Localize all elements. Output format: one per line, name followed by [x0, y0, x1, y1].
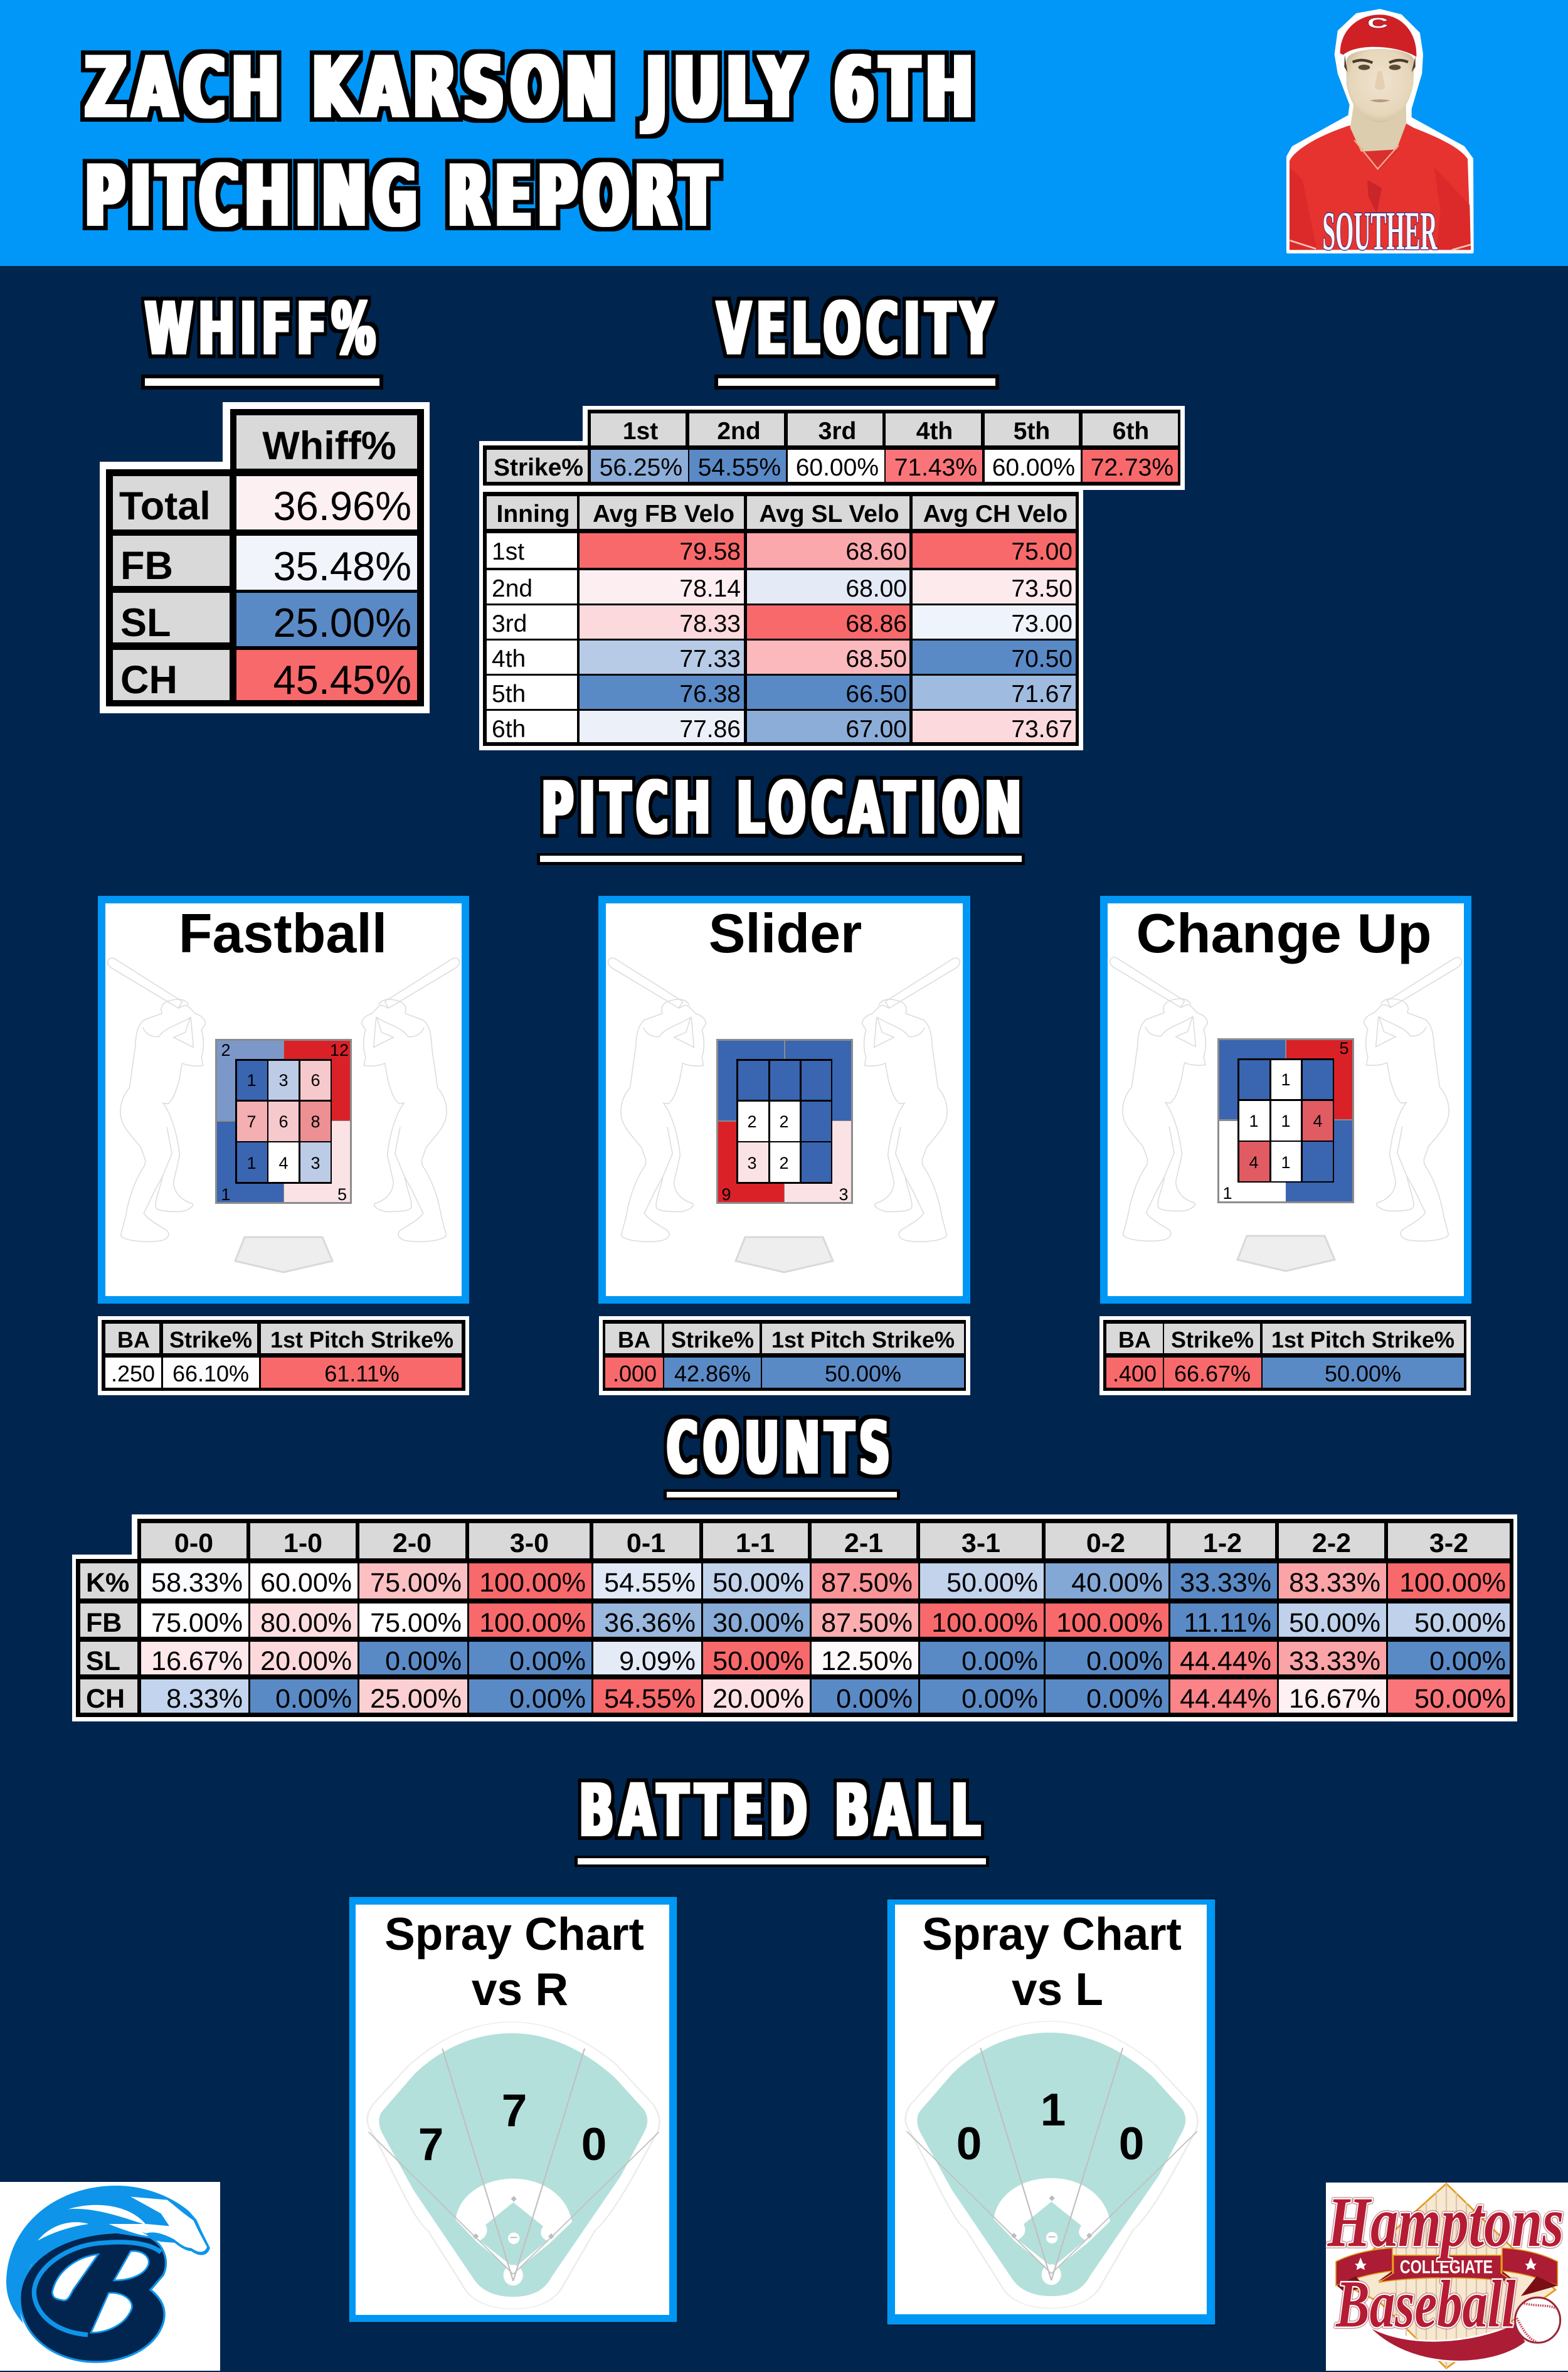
whiff table: Whiff% [262, 424, 396, 468]
velocity by inning table: 2nd [492, 575, 532, 602]
spray L field diagram [906, 2021, 1197, 2308]
row: CH: 8.33% [166, 1684, 243, 1714]
count column headers: 0-0 [174, 1528, 213, 1558]
fastball stat table [98, 1316, 469, 1395]
jersey and cap lettering: C [1367, 14, 1389, 31]
strike percentage by inning table: 72.73% [1091, 454, 1173, 481]
row: FB: 100.00% [931, 1608, 1038, 1638]
velocity by inning table: 68.60 [845, 538, 907, 565]
row: K%: 100.00% [1399, 1568, 1506, 1598]
fastball title: Fastball [179, 902, 387, 964]
row: CH: 44.44% [1180, 1684, 1271, 1714]
heading: batted ball: BATTED BALL [579, 1769, 986, 1853]
spray R title [384, 1909, 644, 2015]
heading: pitch location [537, 767, 1027, 865]
header banner [0, 0, 1568, 266]
change up stat table: .400 [1113, 1361, 1157, 1386]
panel: change up [1100, 896, 1471, 1304]
row: K%: 50.00% [946, 1568, 1038, 1598]
strike zone grid: 2 [221, 1041, 231, 1060]
strike percentage by inning table: 3rd [818, 418, 856, 445]
row: FB: 11.11% [1184, 1608, 1271, 1638]
script wordmarks: Baseball [1335, 2267, 1516, 2341]
strike zone grid: 6 [278, 1112, 289, 1131]
velocity by inning table: Avg SL Velo [759, 501, 899, 528]
strike percentage by inning table: 71.43% [894, 454, 977, 481]
row: SL: SL [86, 1646, 120, 1676]
strike percentage by inning table [479, 406, 1185, 490]
row: SL: 16.67% [151, 1646, 243, 1676]
fastball stat table: Strike% [169, 1327, 252, 1353]
count column headers: 2-2 [1312, 1528, 1351, 1558]
strike percentage by inning table: 54.55% [698, 454, 781, 481]
logo: Bridgehampton B wave [0, 2182, 220, 2371]
strike zone grid: 9 [721, 1185, 731, 1204]
player portrait [1288, 11, 1472, 262]
count column headers: 3-1 [961, 1528, 1000, 1558]
row: K% [80, 1563, 1510, 1598]
row: K%: 75.00% [370, 1568, 462, 1598]
velocity by inning table: 77.33 [679, 646, 741, 673]
strike percentage by inning table: 1st [623, 418, 658, 445]
velocity by inning table: 70.50 [1011, 646, 1073, 673]
home plate [736, 1237, 833, 1272]
row: SL: 44.44% [1180, 1646, 1271, 1676]
strike percentage by inning table: 2nd [717, 418, 761, 445]
row: SL: 9.09% [619, 1646, 696, 1676]
spray L title: Spray Chart [922, 1909, 1182, 1960]
slider stat table: 50.00% [825, 1361, 901, 1386]
slider stat table: 42.86% [674, 1361, 751, 1386]
row: K%: 54.55% [604, 1568, 696, 1598]
panel: spray chart vs R [349, 1896, 677, 2322]
strike zone grid: 3 [310, 1154, 320, 1173]
row: FB: 75.00% [151, 1608, 243, 1638]
spray R hit counts: 7 [502, 2085, 527, 2136]
row: CH: 0.00% [836, 1684, 913, 1714]
spray L hit counts: 0 [956, 2119, 982, 2169]
change up stat table: Strike% [1171, 1327, 1254, 1353]
row: FB: 50.00% [1414, 1608, 1506, 1638]
count column headers: 0-1 [627, 1528, 665, 1558]
strike zone grid: 1 [1222, 1184, 1232, 1203]
whiff table [100, 402, 430, 713]
velocity by inning table: 5th [492, 681, 526, 708]
heading: batted ball [575, 1769, 989, 1867]
velocity by inning table: Inning [497, 501, 569, 528]
velocity by inning table: 6th [492, 716, 526, 743]
velocity by inning table: 77.86 [679, 716, 741, 743]
title: ZACH KARSON JULY 6TH [85, 39, 980, 137]
count column headers: 1-1 [736, 1528, 775, 1558]
velocity by inning table: 75.00 [1011, 538, 1073, 565]
whiff table: FB [120, 544, 173, 588]
strike zone grid: 2 [779, 1154, 789, 1173]
count column headers: 1-2 [1203, 1528, 1242, 1558]
count column headers [141, 1523, 1510, 1558]
row: K%: 83.33% [1289, 1568, 1380, 1598]
velocity by inning table: 71.67 [1011, 681, 1073, 708]
strike zone grid: 1 [246, 1154, 257, 1173]
heading: pitch location: PITCH LOCATION [541, 767, 1027, 851]
whiff table: SL [120, 601, 171, 645]
whiff table: 36.96% [273, 483, 411, 529]
fastball stat table: 66.10% [172, 1361, 249, 1386]
row: K%: 58.33% [151, 1568, 243, 1598]
spray L title [922, 1909, 1182, 2015]
row: CH [80, 1679, 1510, 1714]
row: SL: 20.00% [260, 1646, 352, 1676]
row: K%: 87.50% [821, 1568, 913, 1598]
strike zone grid [215, 1039, 352, 1204]
fastball stat table: 1st Pitch Strike% [270, 1327, 453, 1353]
heading: velocity: VELOCITY [717, 287, 998, 371]
whiff table: 25.00% [273, 600, 411, 646]
slider stat table: Strike% [671, 1327, 754, 1353]
count column headers: 3-0 [510, 1528, 549, 1558]
row: FB: 30.00% [712, 1608, 804, 1638]
strike percentage by inning table: Strike% [494, 454, 583, 481]
spray L hit counts [956, 2085, 1144, 2169]
strike zone grid: 3 [747, 1154, 757, 1173]
heading: velocity [714, 287, 999, 390]
spray R hit counts: 0 [581, 2119, 607, 2170]
row: K%: 60.00% [260, 1568, 352, 1598]
strike zone grid: 1 [246, 1071, 257, 1090]
strike zone grid: 1 [221, 1185, 231, 1204]
strike zone grid [716, 1039, 853, 1204]
change up stat table [1099, 1316, 1471, 1395]
change up stat table: 66.67% [1174, 1361, 1251, 1386]
slider stat table: .000 [613, 1361, 657, 1386]
counts table [72, 1514, 1517, 1721]
whiff table: Total [119, 484, 211, 528]
strike zone grid [1217, 1038, 1354, 1203]
ribbon banner with Collegiate: COLLEGIATE [1400, 2257, 1493, 2277]
heading: counts: COUNTS [667, 1407, 895, 1491]
row: K%: 50.00% [712, 1568, 804, 1598]
strike percentage by inning table: 60.00% [992, 454, 1075, 481]
whiff table: 35.48% [273, 543, 411, 589]
row: FB: 75.00% [370, 1608, 462, 1638]
strike zone grid: 8 [310, 1112, 320, 1131]
row: FB: FB [86, 1608, 122, 1638]
row: SL: 0.00% [1429, 1646, 1506, 1676]
panel: slider [598, 896, 970, 1304]
slider stat table: BA [618, 1327, 650, 1353]
row: CH: 20.00% [712, 1684, 804, 1714]
row: SL: 12.50% [821, 1646, 913, 1676]
velocity by inning table: 68.00 [845, 575, 907, 602]
row: FB: 50.00% [1289, 1608, 1380, 1638]
count column headers: 2-1 [844, 1528, 883, 1558]
strike zone grid: 6 [310, 1071, 320, 1090]
row: CH: 0.00% [961, 1684, 1038, 1714]
strike zone grid: 5 [1339, 1039, 1349, 1058]
jersey and cap lettering [1322, 14, 1438, 262]
row: SL: 0.00% [1086, 1646, 1163, 1676]
strike zone grid: 4 [1249, 1153, 1259, 1172]
row: SL: 0.00% [509, 1646, 586, 1676]
whiff table: 45.45% [273, 657, 411, 703]
spray R hit counts: 7 [418, 2119, 443, 2170]
swoosh and baseball [1367, 2297, 1560, 2361]
slider stat table [599, 1316, 970, 1395]
strike zone grid: 1 [1281, 1070, 1291, 1089]
row: SL: 50.00% [712, 1646, 804, 1676]
strike zone grid: 3 [278, 1071, 289, 1090]
panel: fastball [98, 896, 469, 1304]
row: K%: K% [86, 1568, 129, 1598]
spray L hit counts: 0 [1119, 2119, 1144, 2169]
change up stat table: 1st Pitch Strike% [1271, 1327, 1454, 1353]
strike percentage by inning table: 4th [916, 418, 953, 445]
fastball stat table: 61.11% [324, 1361, 400, 1386]
velocity by inning table: 3rd [492, 610, 527, 637]
row: CH: 16.67% [1289, 1684, 1380, 1714]
title [85, 39, 980, 245]
row: CH: CH [86, 1684, 125, 1714]
strike percentage by inning table: 56.25% [600, 454, 682, 481]
strike zone grid: 2 [747, 1112, 757, 1131]
velocity by inning table: Avg FB Velo [593, 501, 734, 528]
strike percentage by inning table: 6th [1113, 418, 1149, 445]
spray R title: Spray Chart [384, 1909, 644, 1960]
strike zone grid: 4 [1313, 1112, 1323, 1130]
strike zone grid: 1 [1249, 1112, 1259, 1130]
velocity by inning table: 1st [492, 538, 524, 565]
spray R title: vs R [472, 1964, 568, 2015]
row: K%: 100.00% [479, 1568, 586, 1598]
heading: counts [664, 1407, 900, 1500]
heading: whiff [141, 287, 383, 390]
row: FB: 100.00% [1056, 1608, 1163, 1638]
batter silhouettes [108, 958, 459, 1242]
row: K%: 33.33% [1180, 1568, 1271, 1598]
velocity by inning table: 68.86 [845, 610, 907, 637]
velocity by inning table: 67.00 [845, 716, 907, 743]
heading: whiff: WHIFF% [145, 287, 381, 371]
row: SL: 0.00% [385, 1646, 462, 1676]
row: CH: 0.00% [509, 1684, 586, 1714]
batter silhouettes [1110, 957, 1461, 1241]
change up stat table: 50.00% [1325, 1361, 1401, 1386]
strike percentage by inning table: 60.00% [796, 454, 879, 481]
row: CH: 54.55% [604, 1684, 696, 1714]
whiff table: CH [120, 658, 177, 702]
spray L hit counts: 1 [1041, 2085, 1066, 2135]
velocity by inning table [479, 490, 1083, 750]
row: FB: 100.00% [479, 1608, 586, 1638]
velocity by inning table: 66.50 [845, 681, 907, 708]
velocity by inning table: 79.58 [679, 538, 741, 565]
slider stat table: 1st Pitch Strike% [771, 1327, 955, 1353]
strike zone grid: 12 [330, 1041, 349, 1060]
row: FB: 80.00% [260, 1608, 352, 1638]
count column headers: 0-2 [1086, 1528, 1125, 1558]
row: SL [80, 1642, 1510, 1676]
fastball stat table: BA [117, 1327, 150, 1353]
velocity by inning table: 78.14 [679, 575, 741, 602]
logo: Hamptons Collegiate Baseball [1326, 2183, 1568, 2371]
home plate [235, 1237, 332, 1272]
strike zone grid: 3 [839, 1185, 849, 1204]
batter silhouettes [608, 958, 960, 1242]
velocity by inning table: 73.00 [1011, 610, 1073, 637]
spray R field diagram [368, 2022, 659, 2309]
strike percentage by inning table: 5th [1014, 418, 1050, 445]
spray R hit counts [418, 2085, 607, 2170]
change up title: Change Up [1136, 902, 1431, 964]
strike zone grid: 2 [779, 1112, 789, 1131]
velocity by inning table: 76.38 [679, 681, 741, 708]
velocity by inning table: 68.50 [845, 646, 907, 673]
strike zone grid: 7 [246, 1112, 257, 1131]
row: K%: 40.00% [1071, 1568, 1163, 1598]
home plate [1237, 1236, 1335, 1271]
row: CH: 50.00% [1414, 1684, 1506, 1714]
count column headers: 1-0 [283, 1528, 322, 1558]
row: FB [80, 1603, 1510, 1638]
title: PITCHING REPORT [85, 147, 723, 245]
slider title: Slider [709, 902, 862, 964]
change up stat table: BA [1118, 1327, 1151, 1353]
velocity by inning table: 73.67 [1011, 716, 1073, 743]
fastball stat table: .250 [111, 1361, 155, 1386]
row: SL: 33.33% [1289, 1646, 1380, 1676]
row: CH: 0.00% [1086, 1684, 1163, 1714]
count column headers: 3-2 [1429, 1528, 1468, 1558]
velocity by inning table: 73.50 [1011, 575, 1073, 602]
row: SL: 0.00% [961, 1646, 1038, 1676]
row: CH: 0.00% [275, 1684, 352, 1714]
row: FB: 87.50% [821, 1608, 913, 1638]
strike zone grid: 1 [1281, 1112, 1291, 1130]
count column headers: 2-0 [393, 1528, 432, 1558]
velocity by inning table: 78.33 [679, 610, 741, 637]
velocity by inning table: Avg CH Velo [923, 501, 1067, 528]
velocity by inning table: 4th [492, 646, 526, 673]
row: CH: 25.00% [370, 1684, 462, 1714]
strike zone grid: 5 [337, 1185, 347, 1204]
ribbon banner with Collegiate [1336, 2248, 1557, 2296]
row: FB: 36.36% [604, 1608, 696, 1638]
strike zone grid: 4 [278, 1154, 289, 1173]
strike zone grid: 1 [1281, 1153, 1291, 1172]
script wordmarks [1327, 2183, 1564, 2341]
spray L title: vs L [1012, 1964, 1103, 2015]
panel: spray chart vs L [887, 1899, 1216, 2325]
